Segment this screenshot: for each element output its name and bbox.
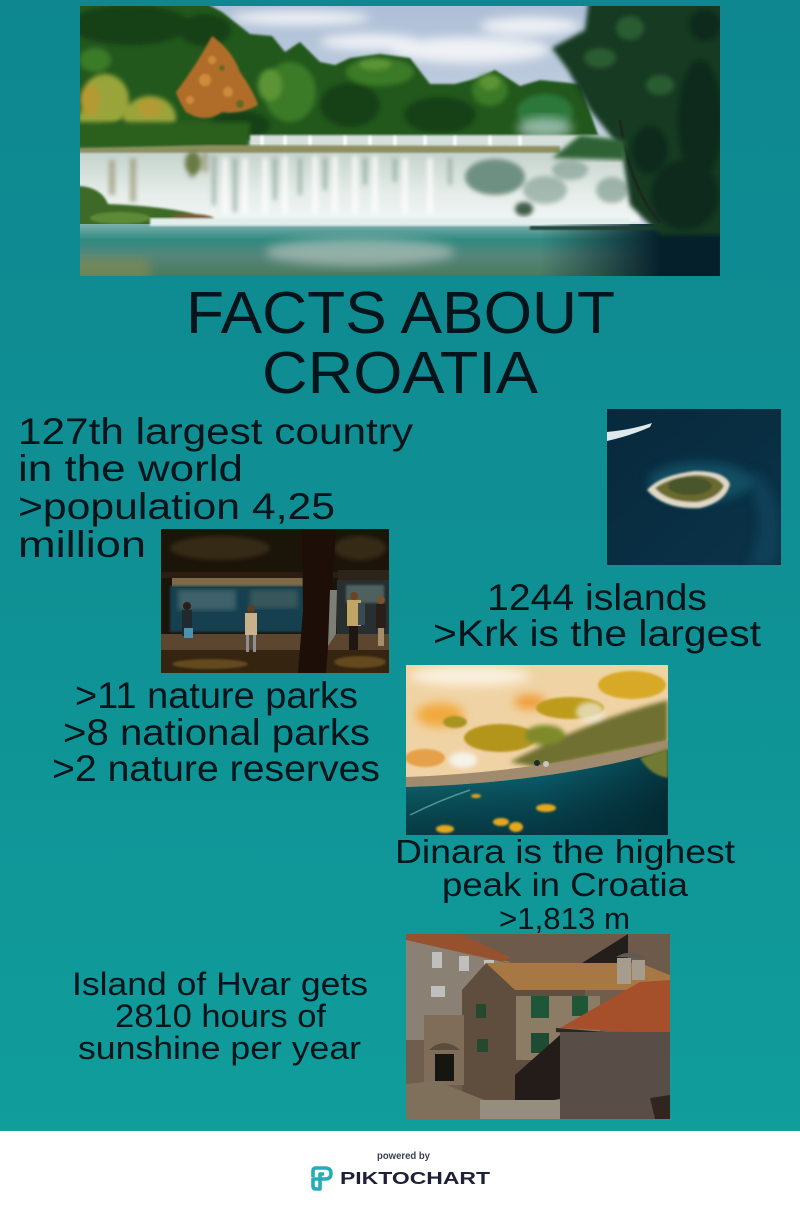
text: parks and reserves: >11 nature parks (75, 675, 358, 716)
right trees (552, 0, 740, 235)
text: islands: 1244 islands (487, 577, 707, 618)
boardwalk (406, 740, 668, 787)
text: country size and population: 127th largest country (18, 411, 414, 452)
text: Dinara peak: >1,813 m (499, 901, 630, 936)
island (647, 471, 730, 508)
text: Hvar sunshine: Island of Hvar gets (72, 966, 368, 1002)
text: parks and reserves: >8 national parks (63, 712, 370, 753)
Piktochart wordmark: PIKTOCHART (340, 1168, 490, 1188)
main falls (70, 153, 640, 222)
text: country size and population: >population 4,25 (18, 486, 335, 527)
upper falls (250, 135, 610, 150)
people (182, 592, 386, 652)
text: islands (433, 577, 762, 654)
photo: Krka waterfall header (80, 6, 720, 276)
chimney (617, 958, 645, 984)
bank (70, 186, 214, 232)
text: islands: >Krk is the largest (433, 613, 762, 654)
photo: Hvar stone houses (406, 934, 670, 1119)
text: Hvar sunshine (72, 966, 368, 1066)
powered by label: powered by (377, 1151, 430, 1162)
lake (80, 224, 720, 276)
text: Dinara peak: peak in Croatia (442, 866, 689, 903)
title: FACTS ABOUT (186, 280, 615, 346)
text: country size and population (18, 411, 414, 565)
text: parks and reserves (52, 675, 380, 789)
forest silhouette (60, 0, 600, 140)
mist (517, 117, 573, 139)
text: parks and reserves: >2 nature reserves (52, 748, 380, 789)
photo: national park boardwalk (406, 665, 668, 835)
left door (424, 1015, 464, 1085)
text: Dinara peak: Dinara is the highest (395, 833, 735, 870)
text: Dinara peak (395, 833, 735, 936)
middle house (462, 963, 585, 1110)
courtyard (406, 1081, 572, 1119)
title: CROATIA (262, 340, 539, 406)
tree trunk (298, 529, 336, 673)
Piktochart logo icon (313, 1168, 331, 1189)
text: Hvar sunshine: 2810 hours of (115, 998, 326, 1034)
photo: aerial island (607, 409, 781, 565)
photo: street scene with tree (161, 529, 389, 673)
footer: white Piktochart band (0, 1131, 800, 1211)
text: country size and population: million (18, 524, 146, 565)
text: Hvar sunshine: sunshine per year (78, 1030, 361, 1066)
text: country size and population: in the world (18, 448, 243, 489)
red roof and right house (560, 980, 670, 1034)
orange tree (176, 36, 258, 118)
title (186, 280, 615, 406)
